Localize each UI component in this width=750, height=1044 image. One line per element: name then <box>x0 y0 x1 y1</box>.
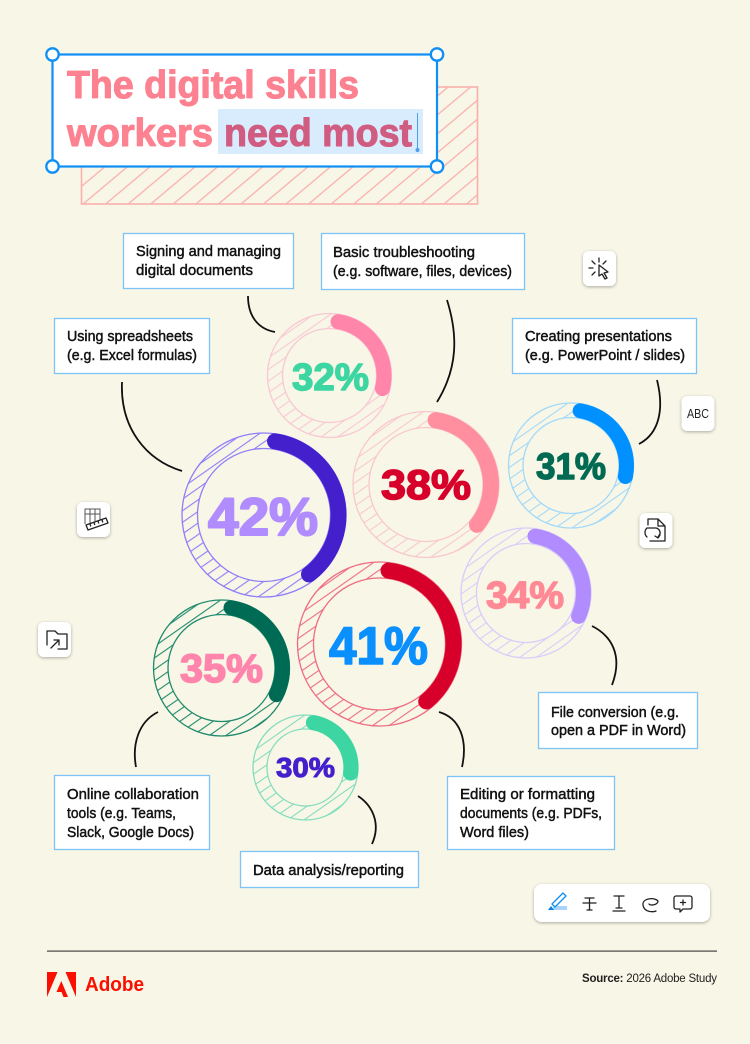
icon: lasso <box>643 899 658 912</box>
label: creating presentations: (e.g. PowerPoint / slides) <box>525 348 685 364</box>
label: file conversion: File conversion (e.g. <box>551 705 679 721</box>
ring: 38% troubleshooting <box>352 411 500 558</box>
title: workers <box>66 112 213 155</box>
label: creating presentations: Creating presentations <box>525 329 672 345</box>
label: data analysis: Data analysis/reporting <box>253 863 404 879</box>
icon: highlighter <box>548 893 567 910</box>
label: using spreadsheets: (e.g. Excel formulas) <box>67 348 197 364</box>
label: data analysis <box>240 852 418 888</box>
label: file conversion <box>538 692 698 748</box>
ring: 30% data analysis <box>253 715 358 820</box>
ring: 42% spreadsheets: 42% <box>208 488 318 547</box>
label: online collaboration <box>54 776 210 850</box>
label: signing and managing <box>124 234 294 288</box>
label: basic troubleshooting <box>322 234 524 290</box>
icon: file convert <box>640 513 672 548</box>
ring: 35% online collaboration: 35% <box>180 647 263 691</box>
title <box>46 48 443 173</box>
ring: 32% signing documents <box>267 313 392 438</box>
label: editing or formatting <box>448 776 614 850</box>
ring: 30% data analysis: 30% <box>276 752 335 783</box>
icon: comment <box>674 896 692 912</box>
icon: strikethrough <box>583 898 596 910</box>
label: editing or formatting: Word files) <box>460 825 529 841</box>
icon: text underline <box>613 896 625 911</box>
icon: spreadsheet ruler <box>77 502 110 537</box>
ring: 31% presentations <box>507 402 635 529</box>
label: basic troubleshooting: Basic troubleshooting <box>333 245 475 261</box>
source: Source: 2026 Adobe Study <box>582 973 717 985</box>
ring: 41% editing documents <box>297 562 462 726</box>
Adobe logo: Adobe <box>85 974 144 996</box>
label: using spreadsheets: Using spreadsheets <box>67 329 193 345</box>
toolbar <box>534 884 710 922</box>
label: signing and managing: Signing and managing <box>136 244 281 260</box>
label: file conversion: open a PDF in Word) <box>551 723 686 739</box>
label: basic troubleshooting: (e.g. software, files, devices) <box>333 264 512 280</box>
label: signing and managing: digital documents <box>136 263 253 279</box>
ring: 34% file conversion <box>460 527 592 659</box>
connector lines <box>122 296 660 844</box>
icon: ABC spellcheck <box>682 396 714 431</box>
ring: 32% signing documents: 32% <box>292 357 369 399</box>
icon: folder share <box>38 622 71 657</box>
ring: 31% presentations: 31% <box>536 446 606 487</box>
icon: cursor click <box>583 251 616 286</box>
footer rule <box>47 950 717 952</box>
label: using spreadsheets <box>54 318 210 374</box>
icon: ABC spellcheck: ABC <box>687 407 709 421</box>
ring: 34% file conversion: 34% <box>486 575 564 617</box>
label: editing or formatting: Editing or formatting <box>460 787 595 803</box>
ring: 35% online collaboration <box>152 598 291 738</box>
title: The digital skills <box>67 64 359 107</box>
label: online collaboration: Online collaboration <box>67 787 199 803</box>
Adobe logo <box>47 972 144 997</box>
title: need most <box>224 112 412 155</box>
ring: 42% spreadsheets <box>179 430 349 600</box>
label: online collaboration: Slack, Google Docs) <box>67 825 194 841</box>
label: online collaboration: tools (e.g. Teams, <box>67 806 176 822</box>
ring: 41% editing documents: 41% <box>329 617 428 676</box>
ring: 38% troubleshooting: 38% <box>381 461 471 508</box>
label: creating presentations <box>512 318 696 374</box>
hatched rectangle behind title <box>82 87 478 204</box>
label: editing or formatting: documents (e.g. PDFs, <box>460 806 602 822</box>
